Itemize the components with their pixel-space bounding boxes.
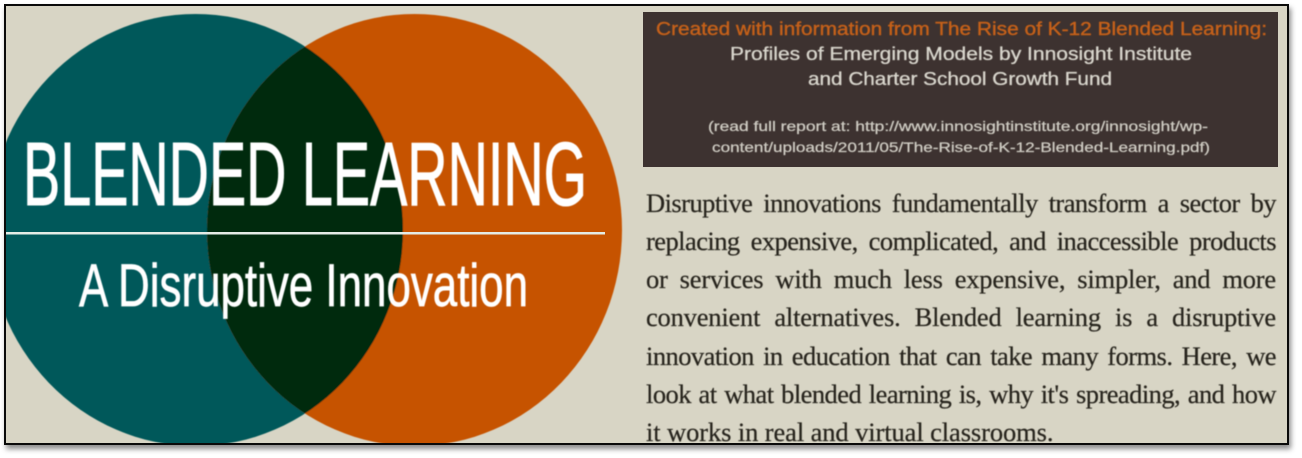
- dark overlap: [206, 46, 404, 414]
- title: Blended Learning: BLENDED LEARNING: [23, 125, 587, 225]
- title rule: [5, 232, 605, 234]
- source line three: and Charter School Growth Fund: [808, 69, 1112, 89]
- report link line one: (read full report at: http://www.innosightinstitute.org/innosight/wp-: [708, 118, 1208, 134]
- intro paragraph: [646, 188, 1277, 445]
- source heading: Created with information from The Rise of K-12 Blended Learning:: [656, 19, 1267, 39]
- intro paragraph: or services with much less expensive, simpler, and more: [646, 264, 1276, 294]
- report link line two: content/uploads/2011/05/The-Rise-of-K-12-Blended-Learning.pdf): [712, 139, 1210, 155]
- venn diagram: [0, 14, 622, 446]
- intro paragraph: innovation in education that can take many forms. Here, we: [646, 341, 1276, 371]
- panel: source credit: [643, 12, 1278, 167]
- intro paragraph: convenient alternatives. Blended learning is a disruptive: [646, 302, 1276, 332]
- orange circle: [207, 14, 622, 446]
- source panel background: [643, 12, 1278, 167]
- subtitle: A Disruptive Innovation: A Disruptive Innovation: [79, 252, 528, 319]
- intro paragraph: look at what blended learning is, why it's spreading, and how: [646, 379, 1276, 409]
- teal circle: [0, 14, 403, 446]
- intro paragraph: replacing expensive, complicated, and inaccessible products: [646, 226, 1276, 256]
- source line two: Profiles of Emerging Models by Innosight Institute: [730, 44, 1192, 64]
- intro paragraph: Disruptive innovations fundamentally transform a sector by: [646, 188, 1276, 218]
